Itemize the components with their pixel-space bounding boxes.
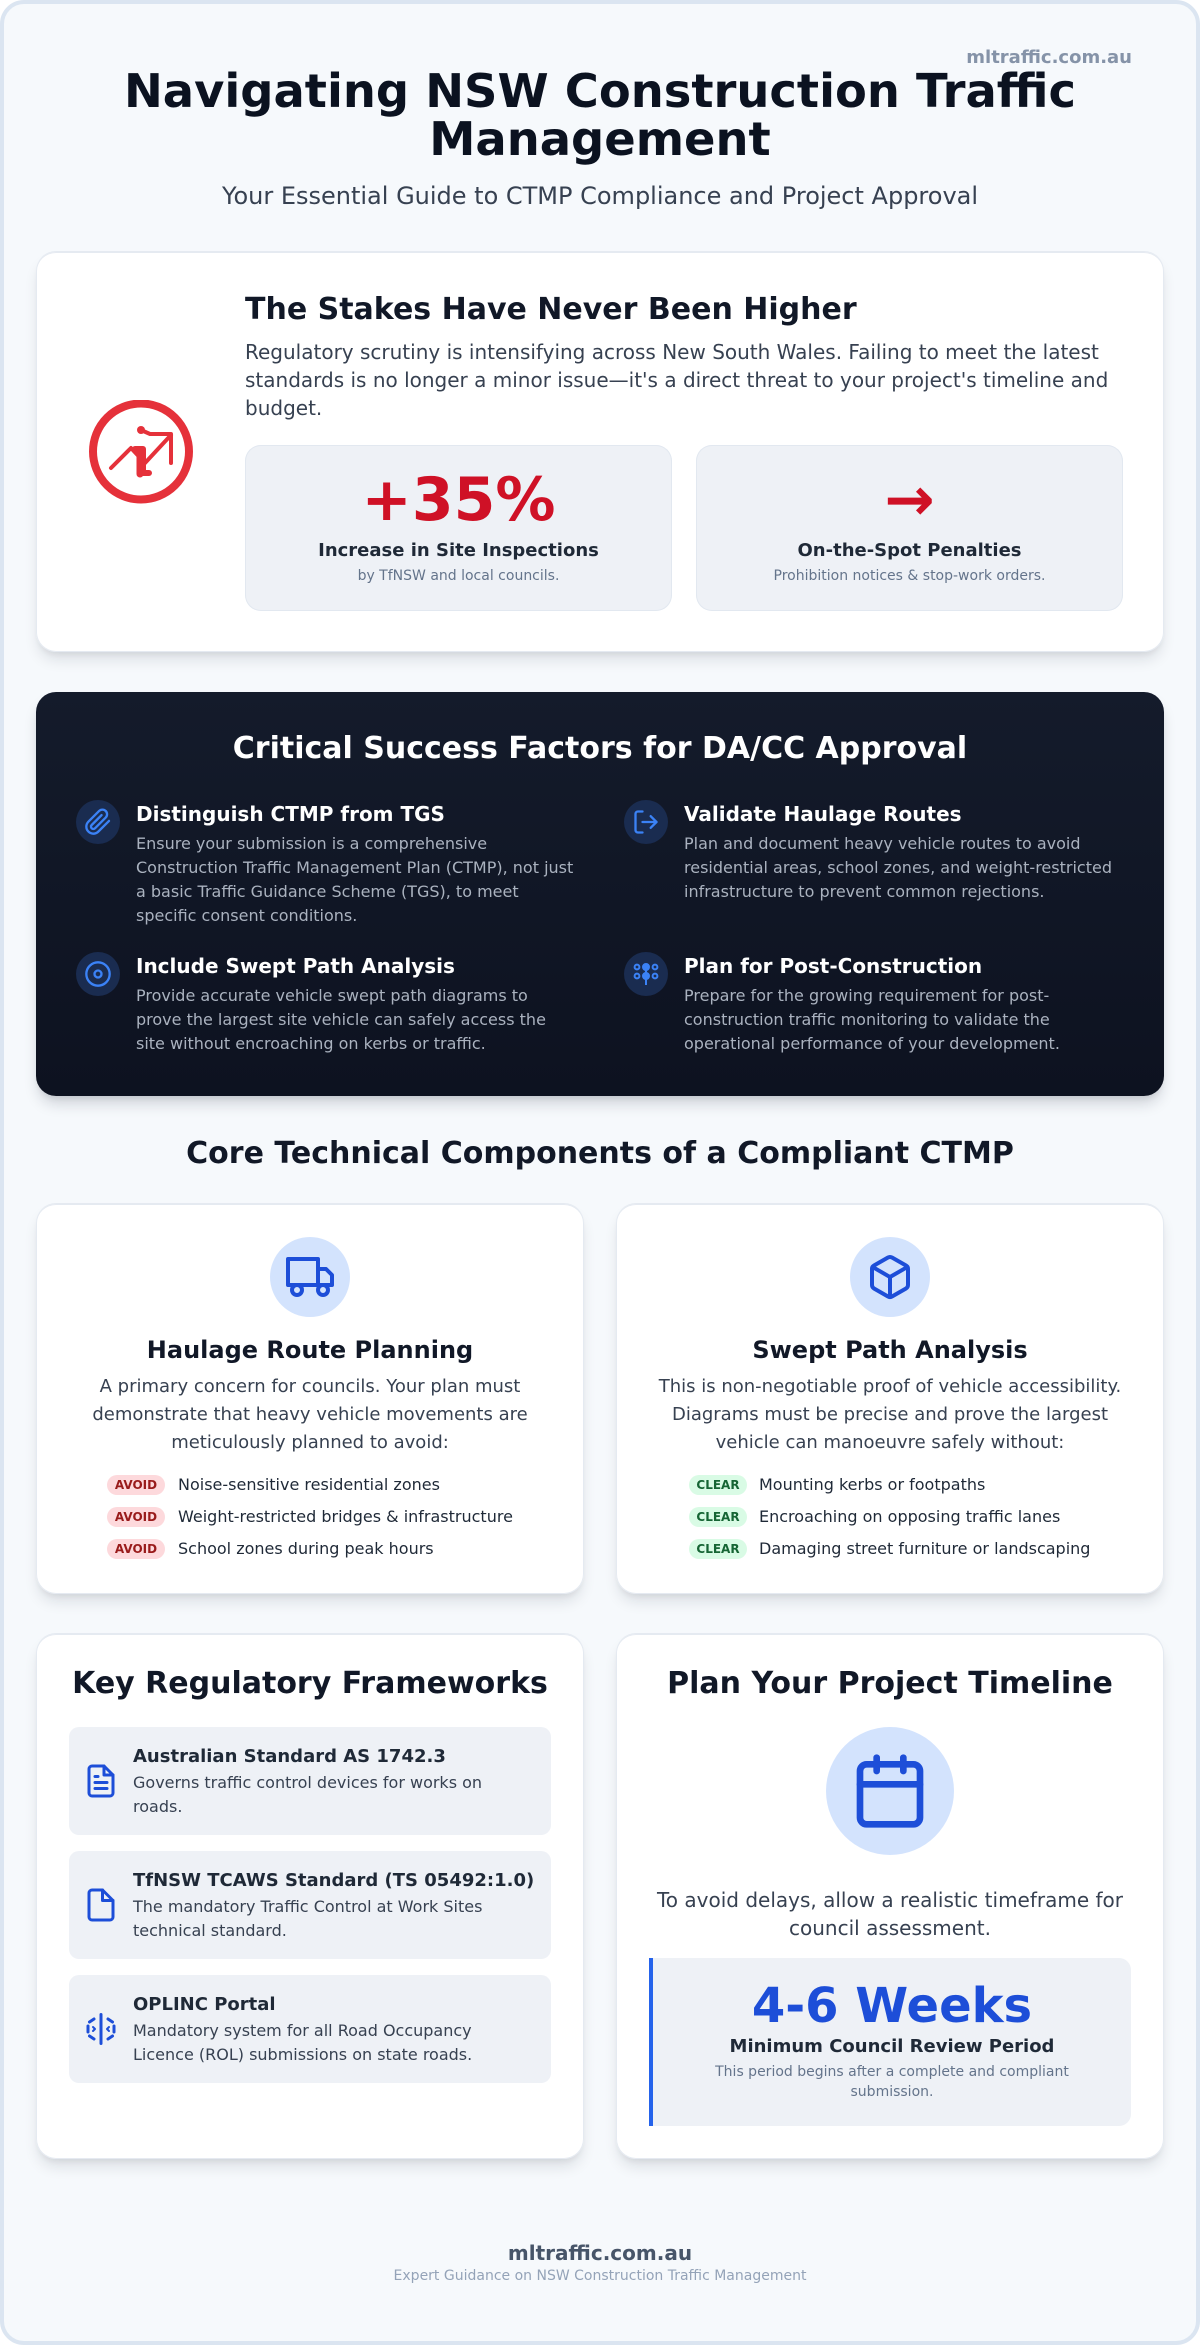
panel: critical success factors — [36, 692, 1164, 1096]
clear item 1: Mounting kerbs or footpaths — [759, 1475, 985, 1494]
factor description: prove the largest site vehicle can safely access the — [136, 1010, 546, 1029]
avoid item 1: AVOID — [115, 1478, 157, 1492]
factor title: Distinguish CTMP from TGS — [136, 802, 445, 826]
footer — [394, 2241, 806, 2284]
clear item 1: CLEAR — [696, 1478, 740, 1492]
factor description: a basic Traffic Guidance Scheme (TGS), to meet — [136, 882, 519, 901]
arrow symbol: → — [884, 465, 935, 535]
factor description: infrastructure to prevent common rejections. — [684, 882, 1044, 901]
panel: haulage route planning — [36, 1203, 584, 1594]
factor description: Construction Traffic Management Plan (CTMP), not just — [136, 858, 573, 877]
intro paragraph: Regulatory scrutiny is intensifying across New South Wales. Failing to meet the latest — [245, 340, 1099, 364]
intro paragraph — [245, 340, 1108, 420]
avoid item 3: AVOID — [115, 1542, 157, 1556]
framework description — [133, 2021, 472, 2064]
avoid item 1: Noise-sensitive residential zones — [178, 1475, 440, 1494]
panel heading: Critical Success Factors for DA/CC Approval — [233, 731, 967, 766]
footer tagline: Expert Guidance on NSW Construction Traffic Management — [394, 2268, 806, 2284]
brand tag top right: mltraffic.com.au — [966, 47, 1132, 68]
avoid item 2: AVOID — [115, 1510, 157, 1524]
factor description — [684, 986, 1060, 1053]
card description — [92, 1376, 528, 1453]
stat number: +35% — [362, 465, 555, 535]
icon: target — [76, 952, 120, 996]
factor title: Plan for Post-Construction — [684, 954, 982, 978]
factor description: residential areas, school zones, and weight-restricted — [684, 858, 1112, 877]
clear item 3: Damaging street furniture or landscaping — [759, 1539, 1090, 1558]
subtitle: Your Essential Guide to CTMP Compliance and Project Approval — [222, 182, 978, 210]
framework description: roads. — [133, 1797, 182, 1816]
factor: swept path — [76, 952, 546, 1053]
factor description: operational performance of your development. — [684, 1034, 1060, 1053]
callout value: 4-6 Weeks — [752, 1978, 1032, 2034]
title — [124, 64, 1076, 166]
card description: demonstrate that heavy vehicle movements are — [92, 1404, 528, 1425]
factor description: specific consent conditions. — [136, 906, 357, 925]
icon: box — [850, 1237, 930, 1317]
icon: exit arrow — [624, 800, 668, 844]
clear item 2: CLEAR — [696, 1510, 740, 1524]
framework title: TfNSW TCAWS Standard (TS 05492:1.0) — [133, 1870, 534, 1891]
callout: review period — [649, 1958, 1131, 2126]
panel: key regulatory frameworks — [36, 1633, 584, 2159]
factor description: Ensure your submission is a comprehensive — [136, 834, 487, 853]
factor description: Provide accurate vehicle swept path diagrams to — [136, 986, 528, 1005]
icon: calendar — [826, 1727, 954, 1855]
factor description: construction traffic monitoring to validate the — [684, 1010, 1050, 1029]
card description: vehicle can manoeuvre safely without: — [716, 1432, 1064, 1453]
factor description: Plan and document heavy vehicle routes to avoid — [684, 834, 1081, 853]
icon: truck — [270, 1237, 350, 1317]
title: Navigating NSW Construction Traffic — [124, 64, 1076, 118]
factor title: Validate Haulage Routes — [684, 802, 962, 826]
panel: the stakes — [36, 251, 1164, 652]
factor description — [684, 834, 1112, 901]
card description: A primary concern for councils. Your plan must — [100, 1376, 520, 1397]
footer brand: mltraffic.com.au — [508, 2241, 692, 2265]
icon: split arrows — [86, 2013, 116, 2045]
heading: The Stakes Have Never Been Higher — [245, 292, 857, 327]
card description — [658, 1376, 1121, 1453]
card title: Haulage Route Planning — [147, 1336, 473, 1364]
callout note: This period begins after a complete and compliant — [715, 2064, 1069, 2080]
icon: rising trend warning — [89, 400, 193, 504]
card heading: Plan Your Project Timeline — [667, 1666, 1113, 1701]
callout note — [715, 2064, 1069, 2100]
clear item 3: CLEAR — [696, 1542, 740, 1556]
framework description: Licence (ROL) submissions on state roads. — [133, 2045, 472, 2064]
stat card: site inspections — [245, 445, 672, 611]
factor: distinguish CTMP — [76, 800, 573, 925]
framework title: Australian Standard AS 1742.3 — [133, 1746, 446, 1767]
stat label: On-the-Spot Penalties — [798, 540, 1022, 561]
framework description — [132, 1897, 482, 1940]
framework description: technical standard. — [133, 1921, 287, 1940]
stat note: Prohibition notices & stop-work orders. — [774, 568, 1045, 584]
card description: This is non-negotiable proof of vehicle accessibility. — [659, 1376, 1121, 1397]
framework description: The mandatory Traffic Control at Work Sites — [133, 1897, 482, 1916]
callout label: Minimum Council Review Period — [730, 2036, 1054, 2057]
intro paragraph: standards is no longer a minor issue—it's a direct threat to your project's timeline and — [245, 368, 1108, 392]
card description: Diagrams must be precise and prove the largest — [672, 1404, 1108, 1425]
clear item 2: Encroaching on opposing traffic lanes — [759, 1507, 1060, 1526]
framework: OPLINC — [69, 1975, 551, 2083]
card heading: Key Regulatory Frameworks — [72, 1666, 548, 1701]
factor: haulage routes — [624, 800, 1112, 901]
intro paragraph: budget. — [245, 396, 322, 420]
framework: TfNSW TCAWS — [69, 1851, 551, 1959]
avoid item 2: Weight-restricted bridges & infrastructure — [178, 1507, 513, 1526]
icon: monitoring nodes — [624, 952, 668, 996]
panel: project timeline — [616, 1633, 1164, 2159]
factor: post-construction — [624, 952, 1060, 1053]
callout note: submission. — [851, 2084, 933, 2100]
stat note: by TfNSW and local councils. — [358, 568, 559, 584]
factor description — [136, 834, 573, 925]
avoid item 3: School zones during peak hours — [178, 1539, 434, 1558]
timeline text: council assessment. — [789, 1916, 991, 1940]
stat label: Increase in Site Inspections — [318, 540, 599, 561]
title: Management — [429, 112, 771, 166]
stat card: penalties — [696, 445, 1123, 611]
timeline text: To avoid delays, allow a realistic timeframe for — [657, 1888, 1123, 1912]
card description: meticulously planned to avoid: — [171, 1432, 449, 1453]
framework description: Governs traffic control devices for works on — [133, 1773, 482, 1792]
panel: swept path analysis — [616, 1203, 1164, 1594]
factor description: site without encroaching on kerbs or traffic. — [136, 1034, 486, 1053]
section heading: Core Technical Components of a Compliant CTMP — [186, 1136, 1014, 1171]
framework: AS 1742.3 — [69, 1727, 551, 1835]
icon: document — [88, 1888, 114, 1922]
icon: document with text — [88, 1764, 114, 1798]
framework description: Mandatory system for all Road Occupancy — [133, 2021, 472, 2040]
timeline text — [656, 1888, 1123, 1940]
framework description — [133, 1773, 482, 1816]
factor description — [136, 986, 546, 1053]
icon: paperclip — [76, 800, 120, 844]
framework title: OPLINC Portal — [133, 1994, 276, 2015]
factor title: Include Swept Path Analysis — [136, 954, 455, 978]
card title: Swept Path Analysis — [752, 1336, 1028, 1364]
factor description: Prepare for the growing requirement for post- — [684, 986, 1049, 1005]
